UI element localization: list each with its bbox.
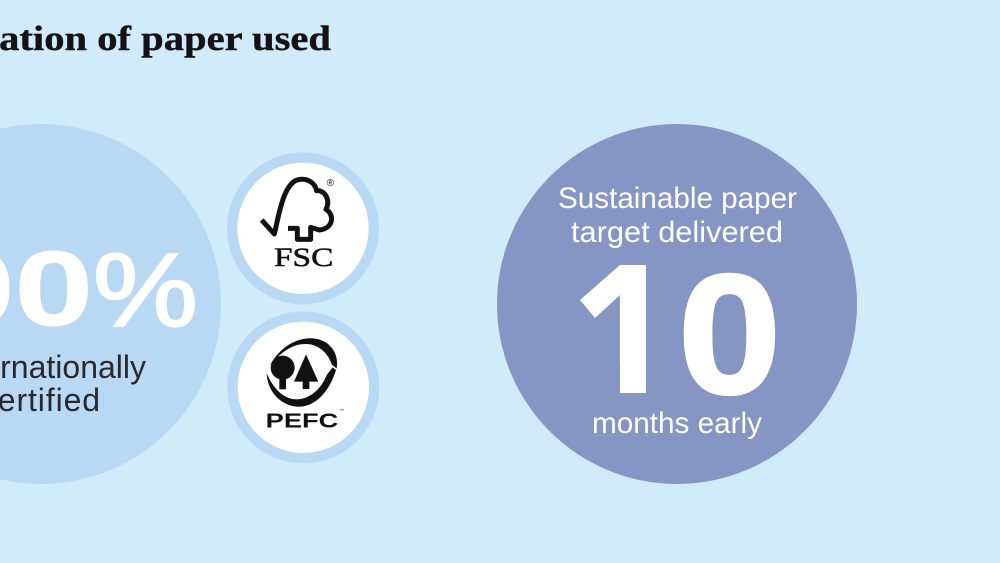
big number: 10 <box>575 236 781 431</box>
caption: internationally certified <box>0 349 146 418</box>
badge: FSC: ® <box>327 178 335 189</box>
text: sustainable paper target delivered: target delivered <box>571 216 783 249</box>
badge: PEFC <box>227 311 379 463</box>
text: sustainable paper target delivered: Sustainable paper <box>558 182 797 215</box>
panel: target delivered 10 months early <box>497 124 857 484</box>
icon: recycling swoosh <box>267 338 337 407</box>
big number: 10: 0 <box>678 239 781 429</box>
panel: 100% internationally certified <box>0 124 221 484</box>
badge: FSC <box>227 152 379 304</box>
badge: FSC: FSC <box>274 243 333 272</box>
icon: conifer <box>294 354 318 389</box>
badge: PEFC: PEFC <box>266 410 338 432</box>
big number: 10: 1 <box>579 236 676 431</box>
text: sustainable paper target delivered <box>558 182 797 249</box>
badge: PEFC: ™ <box>340 408 344 413</box>
text: months early: months early <box>592 407 762 440</box>
icon: round tree <box>271 356 295 380</box>
big number: 100%: % <box>93 233 198 349</box>
big number: 100% <box>0 230 198 349</box>
